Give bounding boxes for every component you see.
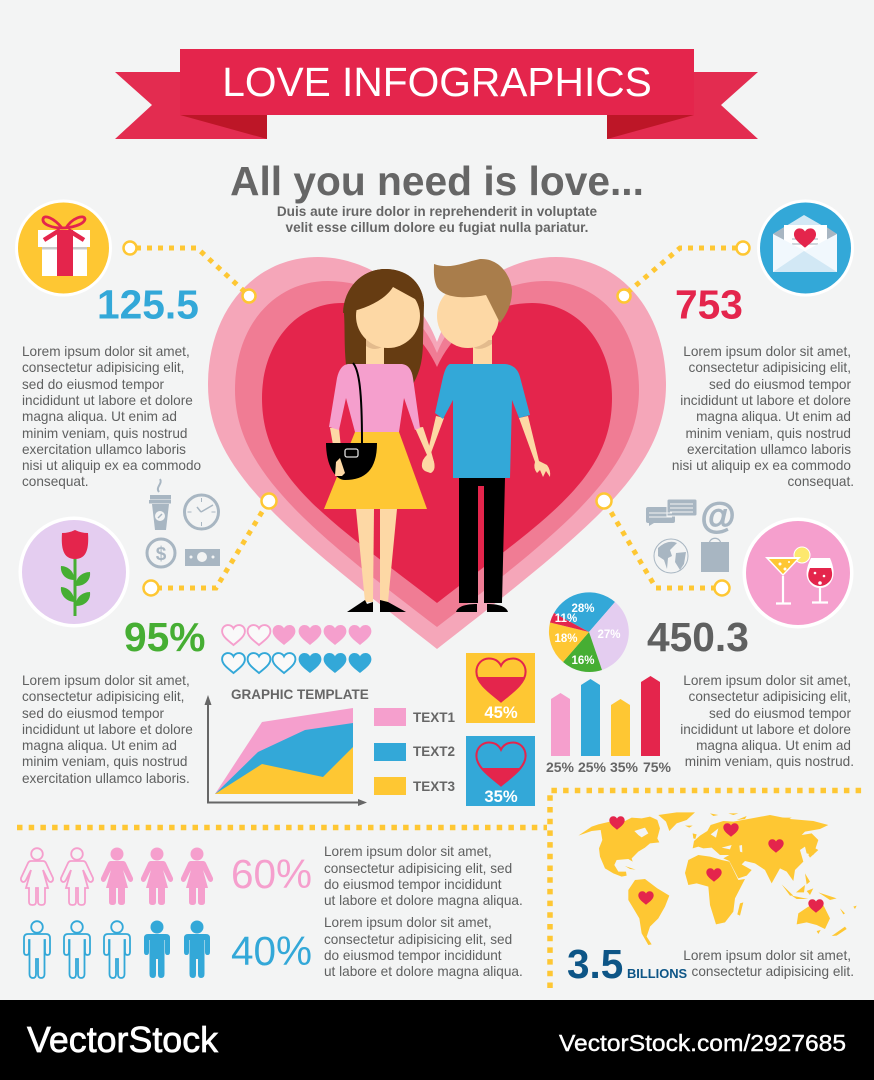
pie chart: 18%: [554, 633, 578, 645]
subtitle: Duis aute irure dolor in reprehenderit in voluptate: [277, 204, 598, 219]
chart legend: TEXT2: [413, 744, 455, 759]
stat: 450.3: 450.3: [647, 614, 749, 660]
stat: 95%: 95%: [124, 614, 205, 660]
text block: top left: sed do eiusmod tempor: [22, 377, 165, 392]
chart legend: [374, 708, 456, 795]
text block: top right: consectetur adipisicing elit,: [689, 360, 851, 375]
text block: women: do eiusmod tempor incididunt: [324, 877, 502, 892]
text block: mid right: magna aliqua. Ut enim ad: [696, 738, 851, 753]
stat: 3.5 billions: BILLIONS: [627, 966, 688, 981]
icon group: coffee, clock, coin, banknote: $: [156, 544, 167, 565]
heart gauge: 35%: 35%: [484, 787, 518, 806]
text block: top left: consequat.: [22, 474, 89, 489]
text block: top left: minim veniam, quis nostrud: [22, 426, 187, 441]
pie chart: 16%: [571, 655, 595, 667]
text block: men: consectetur adipisicing elit, sed: [324, 932, 512, 947]
layered heart background: [208, 257, 666, 649]
icon group: chat, at sign, globe, bag: [646, 495, 736, 573]
text block: mid left: consectetur adipisicing elit,: [22, 689, 184, 704]
stat: 753: 753: [675, 282, 743, 328]
pie chart: [549, 592, 629, 672]
footer bar: [0, 1000, 874, 1080]
world map: [578, 812, 857, 945]
chart legend: TEXT3: [413, 779, 456, 794]
text block: mid right: incididunt ut labore et dolore: [680, 722, 851, 737]
footer bar: VectorStock: [27, 1019, 219, 1060]
text block: top left: magna aliqua. Ut enim ad: [22, 409, 177, 424]
text block: mid right: minim veniam, quis nostrud.: [685, 754, 854, 769]
text block: top right: minim veniam, quis nostrud: [686, 426, 851, 441]
text block: top right: incididunt ut labore et dolore: [680, 393, 851, 408]
text block: top right: magna aliqua. Ut enim ad: [696, 409, 851, 424]
connector: rose to heart: [144, 494, 276, 596]
subtitle: velit esse cillum dolore eu fugiat nulla pariatur.: [286, 220, 588, 235]
text block: map: consectetur adipisicing elit.: [692, 964, 854, 979]
pie chart: 27%: [597, 629, 621, 641]
text block: mid right: Lorem ipsum dolor sit amet,: [683, 673, 851, 688]
text block: map: Lorem ipsum dolor sit amet,: [683, 948, 851, 963]
title ribbon banner: [115, 49, 758, 139]
text block: mid left: sed do eiusmod tempor: [22, 706, 165, 721]
pictogram: men 40%: [24, 920, 210, 978]
connector: cocktail to heart: [596, 494, 730, 596]
text block: mid left: magna aliqua. Ut enim ad: [22, 738, 177, 753]
icon: love letter: [757, 200, 854, 296]
text block: top left: exercitation ullamco laboris: [22, 442, 186, 457]
text block: top left: consectetur adipisicing elit,: [22, 360, 184, 375]
hearts rating: pink: [222, 625, 371, 645]
bar chart: 25%: [546, 759, 575, 775]
text block: women: consectetur adipisicing elit, sed: [324, 861, 512, 876]
text block: women: ut labore et dolore magna aliqua.: [324, 893, 523, 908]
bar chart: [546, 676, 672, 775]
connector: envelope to heart: [618, 242, 750, 302]
stat: 125.5: 125.5: [97, 282, 199, 328]
text block: top left: incididunt ut labore et dolore: [22, 393, 193, 408]
heart gauge: 45%: [466, 653, 535, 723]
icon: rose: [18, 516, 130, 628]
icon: gift: [15, 200, 112, 296]
stat: 3.5 billions: 3.5: [567, 941, 623, 987]
heart gauge: 45%: 45%: [484, 703, 518, 722]
connector: gift to heart: [124, 242, 256, 302]
area chart: [204, 695, 367, 806]
icon group: chat, at sign, globe, bag: @: [700, 495, 736, 536]
pictogram: women 60%: [21, 848, 213, 905]
text block: top left: Lorem ipsum dolor sit amet,: [22, 344, 190, 359]
title ribbon banner: LOVE INFOGRAPHICS: [222, 59, 652, 105]
text block: top right: consequat.: [787, 474, 854, 489]
bar chart: 35%: [610, 759, 639, 775]
text block: top right: sed do eiusmod tempor: [709, 377, 851, 392]
chart heading: GRAPHIC TEMPLATE: [231, 687, 369, 702]
stat: 3.5 billions: [567, 941, 688, 987]
bar chart: 25%: [578, 759, 607, 775]
heart gauge: 35%: [466, 736, 535, 806]
text block: women: Lorem ipsum dolor sit amet,: [324, 844, 492, 859]
text block: mid left: minim veniam, quis nostrud: [22, 754, 187, 769]
text block: mid left: incididunt ut labore et dolore: [22, 722, 193, 737]
stat: 40%: 40%: [231, 928, 312, 974]
couple: woman: [324, 269, 435, 612]
text block: top right: Lorem ipsum dolor sit amet,: [683, 344, 851, 359]
couple: man: [423, 259, 550, 612]
text block: mid left: Lorem ipsum dolor sit amet,: [22, 673, 190, 688]
footer bar: VectorStock.com/2927685: [559, 1030, 846, 1056]
chart legend: TEXT1: [413, 710, 456, 725]
map hearts: [609, 816, 824, 913]
stat: 60%: 60%: [231, 851, 312, 897]
text block: men: do eiusmod tempor incididunt: [324, 948, 502, 963]
text block: mid right: sed do eiusmod tempor: [709, 706, 851, 721]
icon: cocktails: [742, 518, 854, 628]
text block: top left: nisi ut aliquip ex ea commodo: [22, 458, 201, 473]
pie chart: 11%: [555, 613, 577, 625]
text block: mid right: consectetur adipisicing elit,: [689, 689, 851, 704]
pie chart: 28%: [571, 603, 595, 615]
hearts rating: blue: [222, 653, 371, 673]
bar chart: 75%: [643, 759, 672, 775]
icon group: coffee, clock, coin, banknote: [147, 479, 220, 567]
heading: All you need is love...: [230, 158, 644, 204]
text block: top right: exercitation ullamco laboris: [687, 442, 851, 457]
text block: men: Lorem ipsum dolor sit amet,: [324, 915, 492, 930]
text block: mid left: exercitation ullamco laboris.: [22, 771, 190, 786]
text block: men: ut labore et dolore magna aliqua.: [324, 964, 523, 979]
text block: top right: nisi ut aliquip ex ea commodo: [672, 458, 851, 473]
